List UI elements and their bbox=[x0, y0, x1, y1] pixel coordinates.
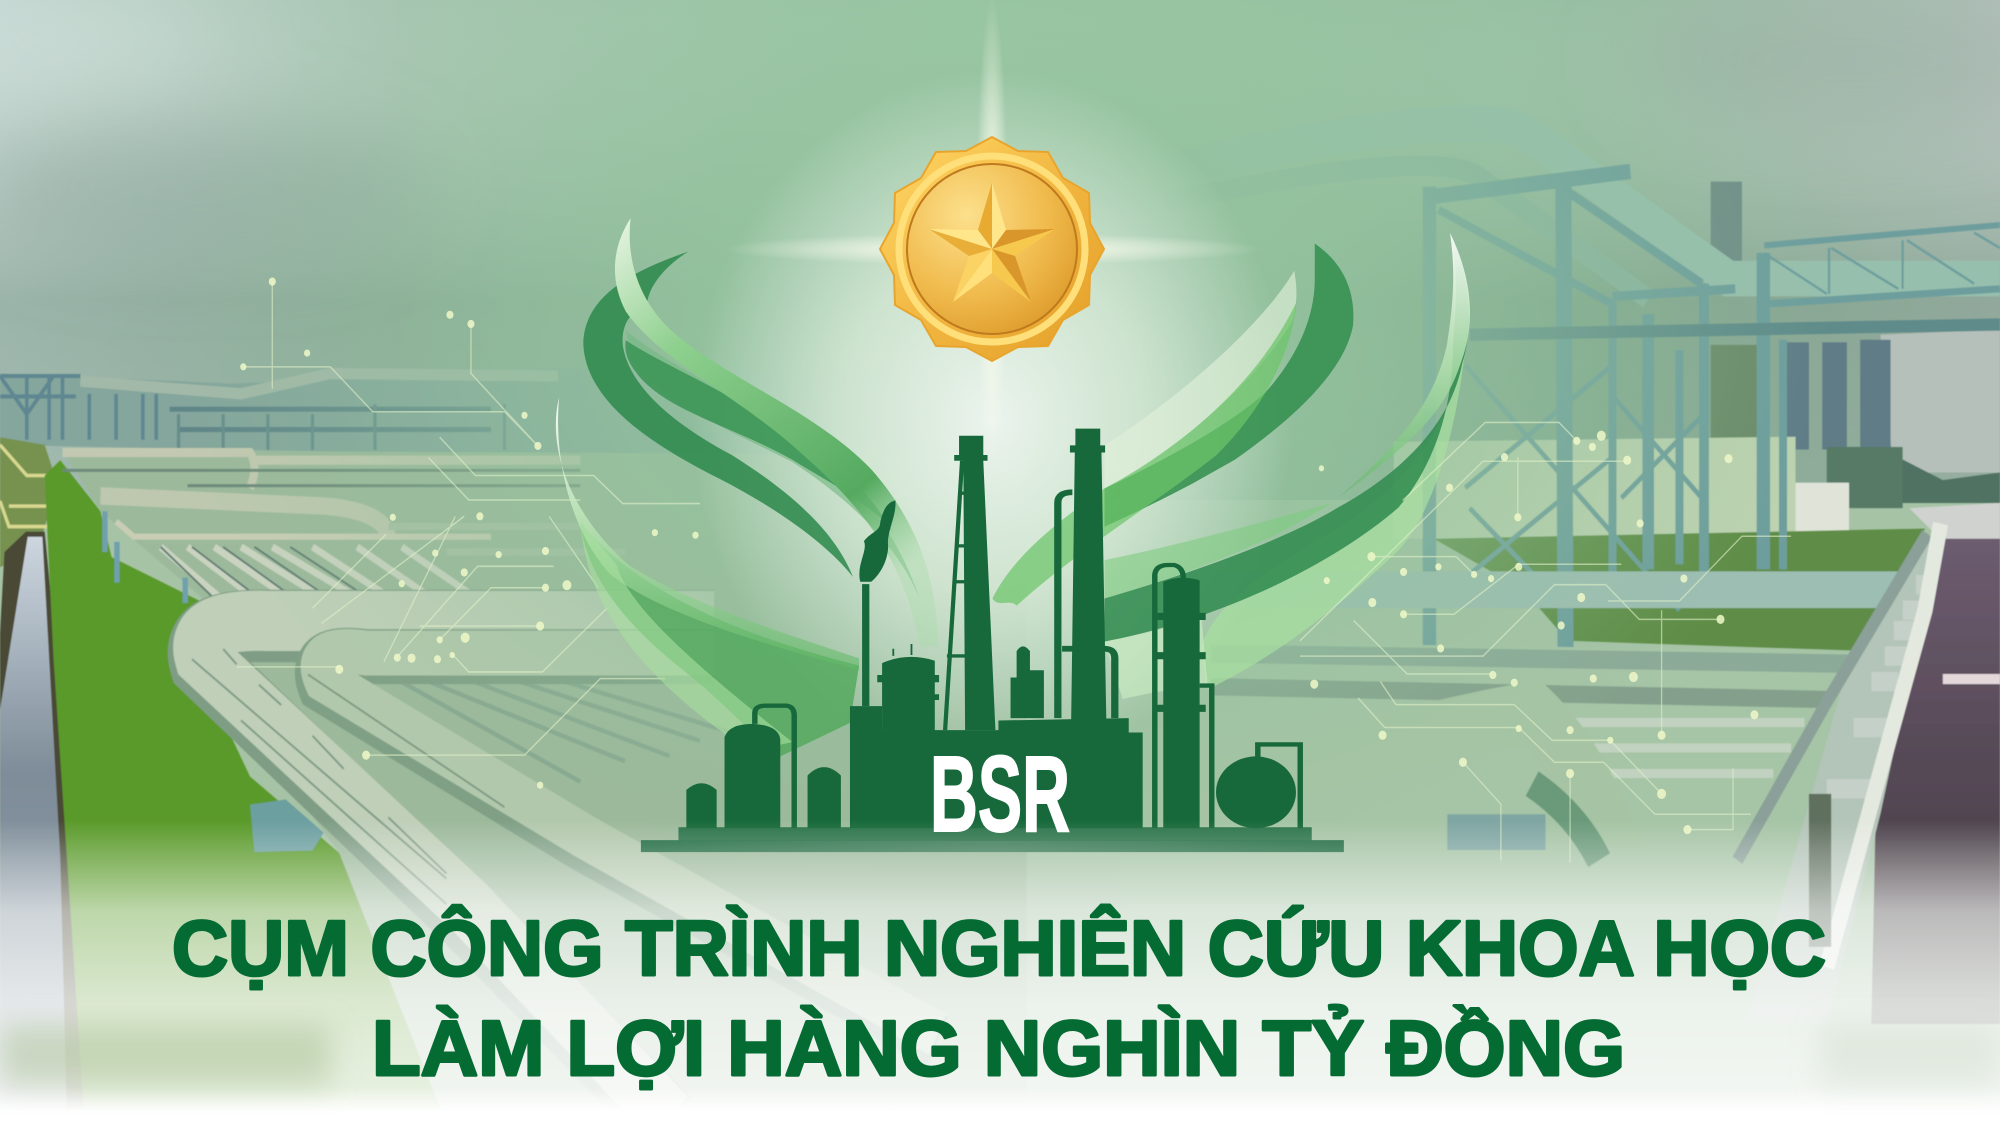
middle column bbox=[1011, 646, 1044, 718]
circuit lines right bbox=[1300, 422, 1791, 863]
right tower bbox=[1157, 578, 1206, 828]
small tanks bbox=[686, 767, 841, 828]
central green wash bbox=[170, 0, 1830, 890]
circuit nodes left bbox=[240, 278, 699, 789]
background photo: right steel structure and road bbox=[1121, 124, 2000, 1024]
swooshes right bbox=[992, 232, 1470, 699]
background photo: left pipelines and grass bbox=[0, 368, 1027, 1124]
bottom foliage and ground bbox=[0, 1025, 2000, 1085]
BSR logo text: BSR bbox=[930, 733, 1070, 854]
circuit lines left bbox=[237, 282, 700, 755]
tank bbox=[877, 644, 939, 732]
stack one bbox=[954, 436, 995, 730]
refinery silhouette bbox=[641, 429, 1344, 852]
stack two bbox=[1070, 429, 1106, 721]
flare chimney and smoke bbox=[859, 500, 896, 706]
circuit nodes right bbox=[1310, 431, 1758, 834]
title line 1: CỤM CÔNG TRÌNH NGHIÊN CỨU KHOA HỌC bbox=[172, 904, 1826, 992]
central light glow bbox=[692, 70, 1292, 770]
title line 2: LÀM LỢI HÀNG NGHÌN TỶ ĐỒNG bbox=[372, 1004, 1625, 1092]
swooshes left bbox=[556, 218, 938, 756]
main block bbox=[850, 706, 1143, 828]
title bbox=[172, 904, 1826, 1092]
bottom white fade bbox=[0, 820, 2000, 1124]
left tank bbox=[725, 724, 780, 828]
light rays behind medal bbox=[722, 0, 1262, 465]
icon: medal star bbox=[929, 183, 1055, 302]
icon: gold medal bbox=[880, 137, 1104, 361]
sphere tank bbox=[1216, 756, 1296, 828]
ground bar bbox=[641, 840, 1344, 852]
